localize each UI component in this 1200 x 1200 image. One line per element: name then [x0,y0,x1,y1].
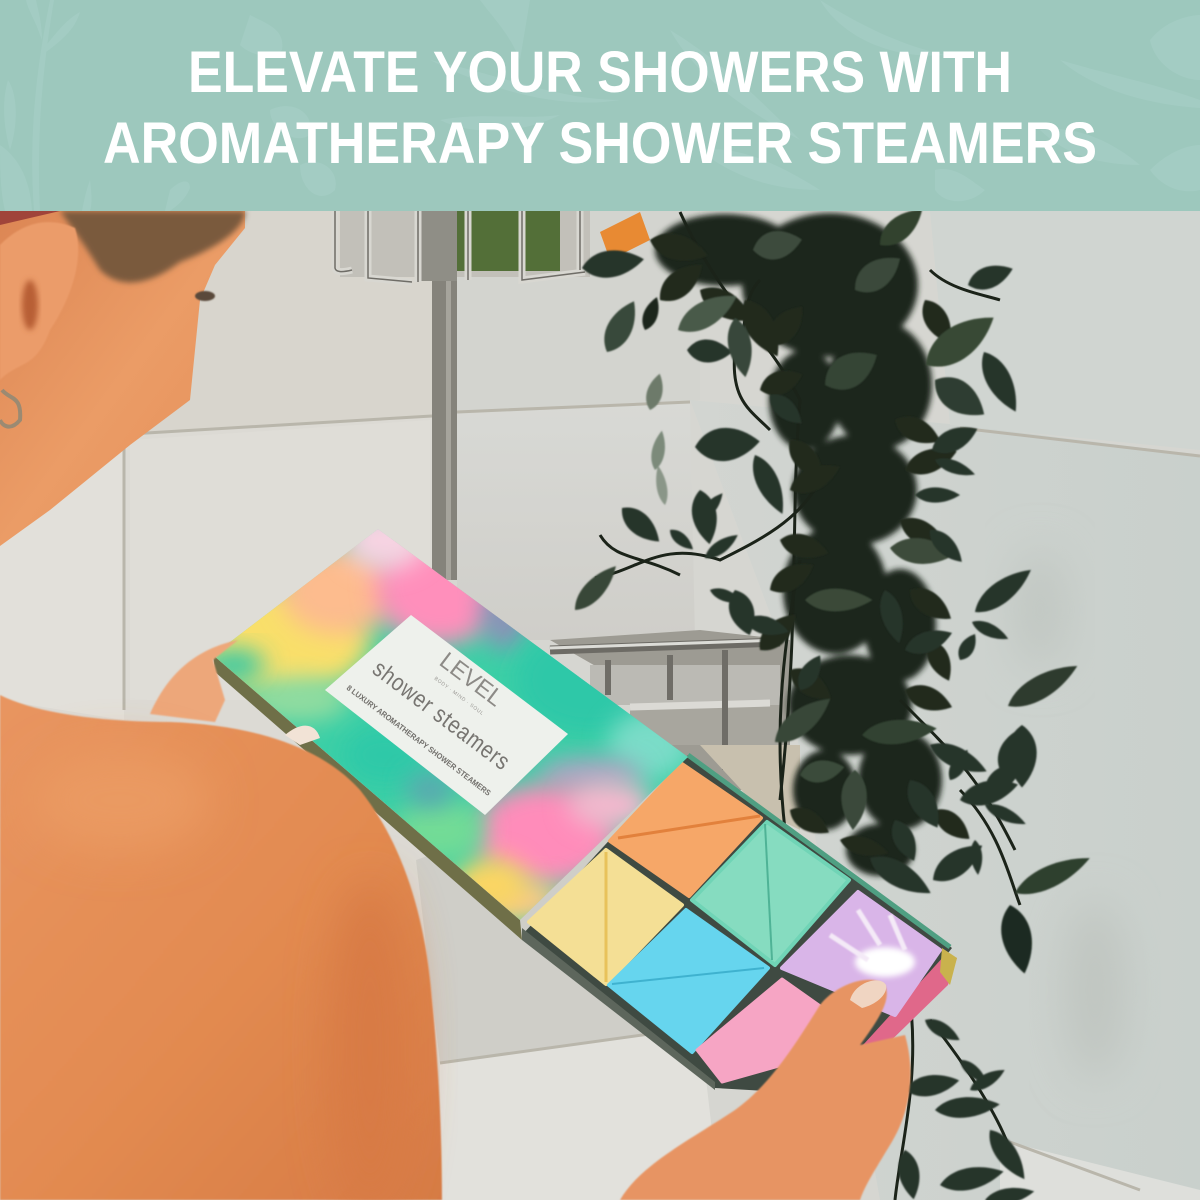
product name: shower steamers [367,655,515,776]
trailing plant [568,201,1094,1200]
banner [0,0,1200,211]
steamer tray [522,755,957,1100]
upper chrome shower basket [335,211,650,580]
person: right hand on steamers [620,980,910,1200]
box lid: gradient sleeve [200,510,692,940]
vines [595,212,1020,1200]
steamer: orange [610,764,761,896]
brand tagline: BODY · MIND · SOUL [433,676,485,717]
edge foliage breaking up the mass [647,228,976,862]
dark foliage mass [655,213,942,876]
steamer: pink [697,979,840,1082]
person: left hand holding box [150,640,320,745]
steamer: mint [692,822,849,965]
open tray base [522,755,952,1095]
title [103,40,1097,176]
steamer: blue [609,910,768,1052]
product label [325,615,568,815]
lower corner caddy [550,630,800,830]
person: shoulder and back [0,695,442,1200]
brand name: LEVEL [434,647,508,712]
product descriptor: 8 LUXURY AROMATHERAPY SHOWER STEAMERS [345,683,493,798]
leaves [568,201,1094,1200]
banner botanical pattern [0,0,1200,211]
steamer: purple [782,892,940,1015]
title: ELEVATE YOUR SHOWERS WITH [188,40,1012,105]
steamer: yellow [529,850,682,984]
title: AROMATHERAPY SHOWER STEAMERS [103,111,1097,176]
person: head and hair [0,211,245,546]
